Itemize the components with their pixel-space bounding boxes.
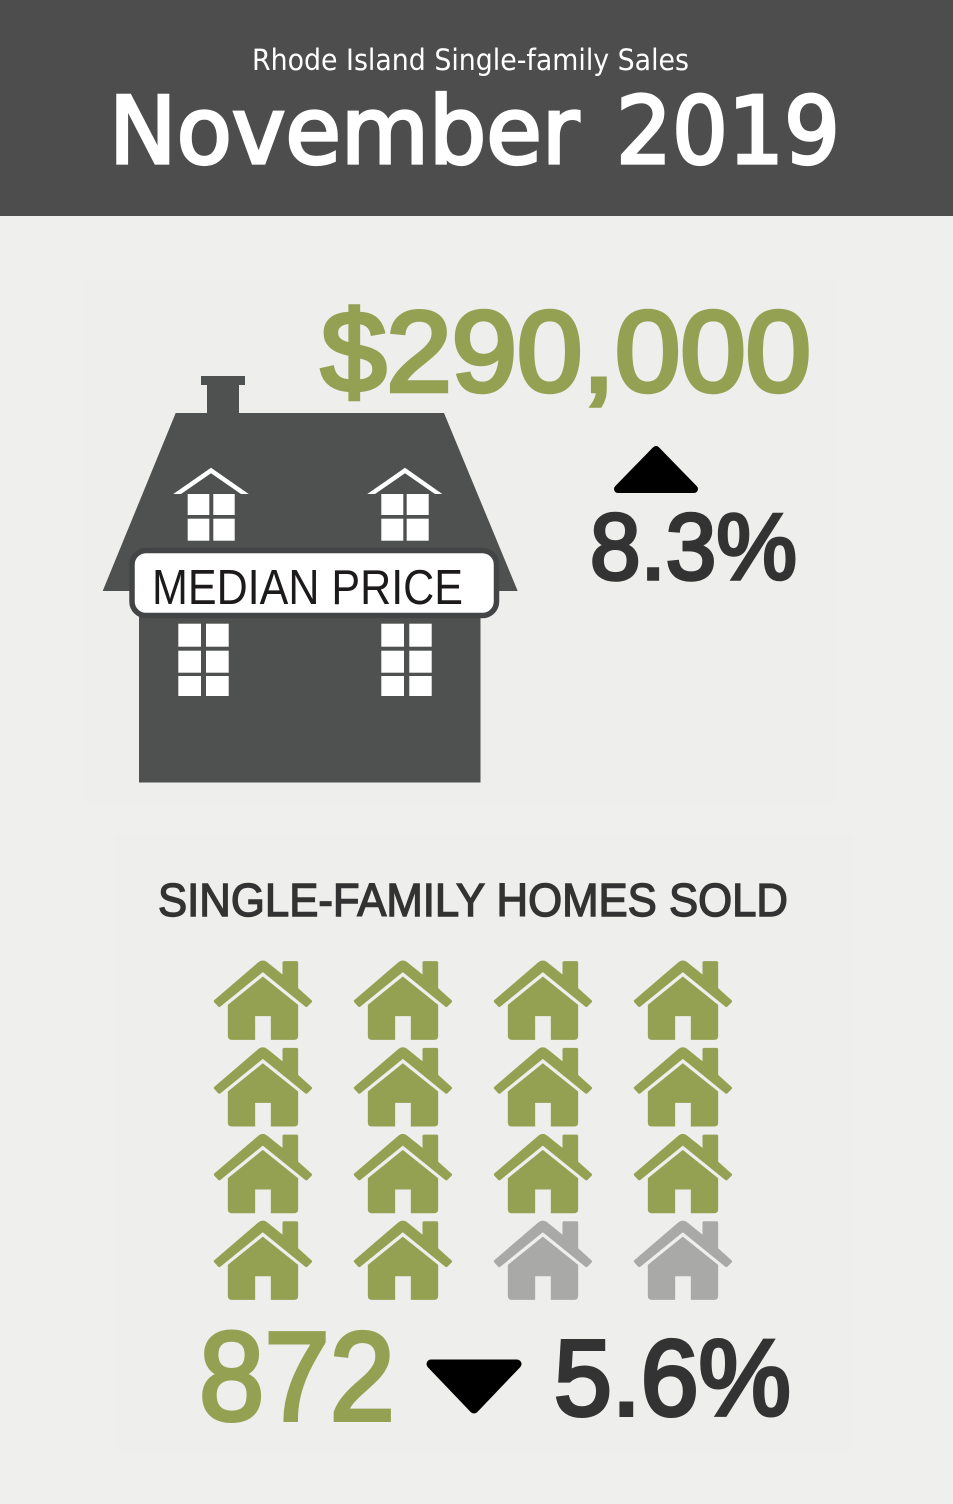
lower left window bbox=[178, 624, 229, 696]
panel: homes sold background bbox=[115, 835, 853, 1450]
header subtitle: Rhode Island Single-family Sales bbox=[252, 43, 689, 77]
title: November bbox=[109, 77, 580, 185]
row 2 bbox=[214, 1047, 732, 1127]
upper left window bbox=[173, 468, 249, 541]
median price sign: MEDIAN PRICE bbox=[152, 561, 463, 615]
icon: down arrow bbox=[431, 1364, 517, 1409]
median price change: 8.3% bbox=[590, 494, 797, 599]
median price value: $290,000 bbox=[321, 289, 811, 416]
title: 2019 bbox=[616, 77, 840, 185]
upper right window bbox=[367, 468, 442, 541]
roof and body bbox=[103, 413, 518, 782]
homes sold change: 5.6% bbox=[554, 1317, 791, 1438]
chimney bbox=[201, 376, 245, 415]
row 1 bbox=[214, 960, 732, 1040]
pictogram: houses sold bbox=[214, 960, 732, 1300]
lower right window bbox=[381, 624, 432, 696]
icon: large house bbox=[103, 376, 518, 782]
homes sold value: 872 bbox=[199, 1306, 395, 1447]
title bbox=[109, 77, 840, 185]
icon: up arrow bbox=[618, 450, 694, 489]
row 3 bbox=[214, 1134, 732, 1213]
panel: median price background bbox=[83, 280, 836, 802]
row 4 bbox=[214, 1221, 732, 1300]
header band bbox=[0, 0, 953, 216]
homes sold heading: SINGLE-FAMILY HOMES SOLD bbox=[158, 874, 788, 926]
